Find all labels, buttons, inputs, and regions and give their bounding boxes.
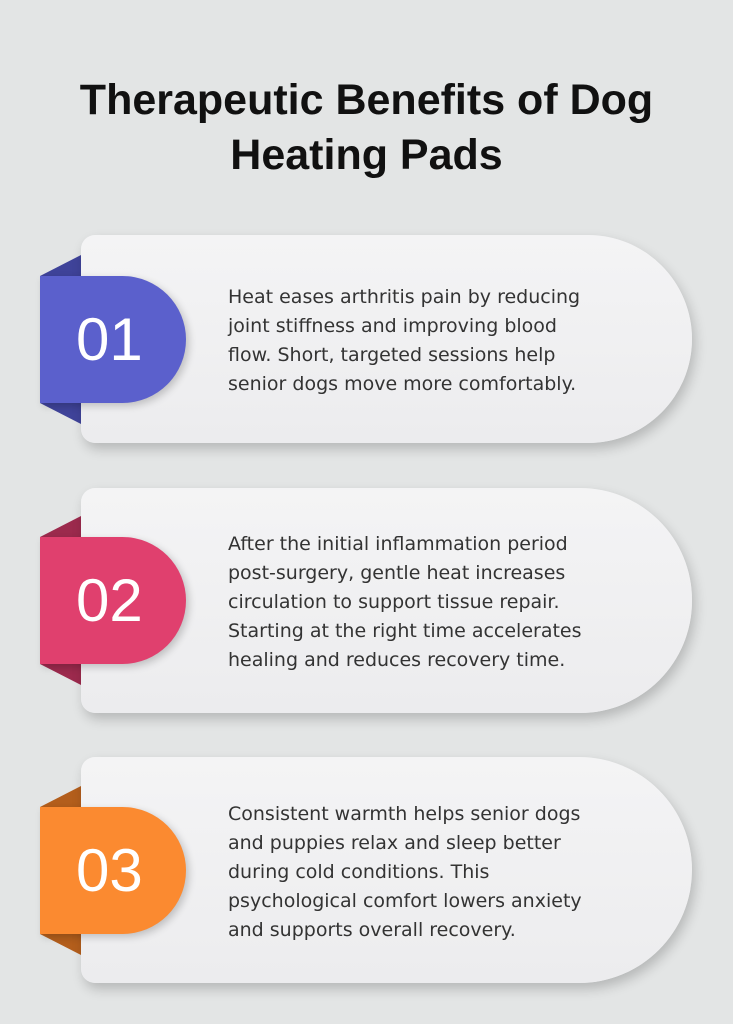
fold top [40, 786, 81, 955]
badge 02 [40, 537, 186, 664]
title: Heating Pads [230, 131, 503, 179]
text 03: psychological comfort lowers anxiety [228, 890, 582, 912]
badge 02: 02 [76, 567, 143, 634]
title [80, 76, 653, 179]
text 03: and supports overall recovery. [228, 919, 516, 941]
card [81, 488, 692, 713]
title: Therapeutic Benefits of Dog [80, 76, 653, 124]
fold top [40, 255, 81, 424]
badge 01 [40, 276, 186, 403]
text 03: during cold conditions. This [228, 861, 489, 883]
panel: item 02 [40, 488, 700, 724]
text 01: senior dogs move more comfortably. [228, 373, 576, 395]
badge 03 [40, 807, 186, 934]
text 02: healing and reduces recovery time. [228, 649, 565, 671]
text 02: Starting at the right time accelerates [228, 620, 582, 642]
text 01: joint stiffness and improving blood [228, 315, 557, 337]
text 02: post-surgery, gentle heat increases [228, 562, 565, 584]
text 03 [228, 803, 582, 941]
text 03: Consistent warmth helps senior dogs [228, 803, 580, 825]
text 01 [228, 286, 580, 395]
card [81, 757, 692, 983]
text 02: After the initial inflammation period [228, 533, 568, 555]
fold top [40, 516, 81, 685]
text 01: Heat eases arthritis pain by reducing [228, 286, 580, 308]
text 01: flow. Short, targeted sessions help [228, 344, 555, 366]
badge 03: 03 [76, 837, 143, 904]
badge 01: 01 [76, 306, 143, 373]
card [81, 235, 692, 443]
panel: item 01 [40, 235, 700, 454]
text 02 [228, 533, 582, 671]
text 03: and puppies relax and sleep better [228, 832, 561, 854]
text 02: circulation to support tissue repair. [228, 591, 560, 613]
